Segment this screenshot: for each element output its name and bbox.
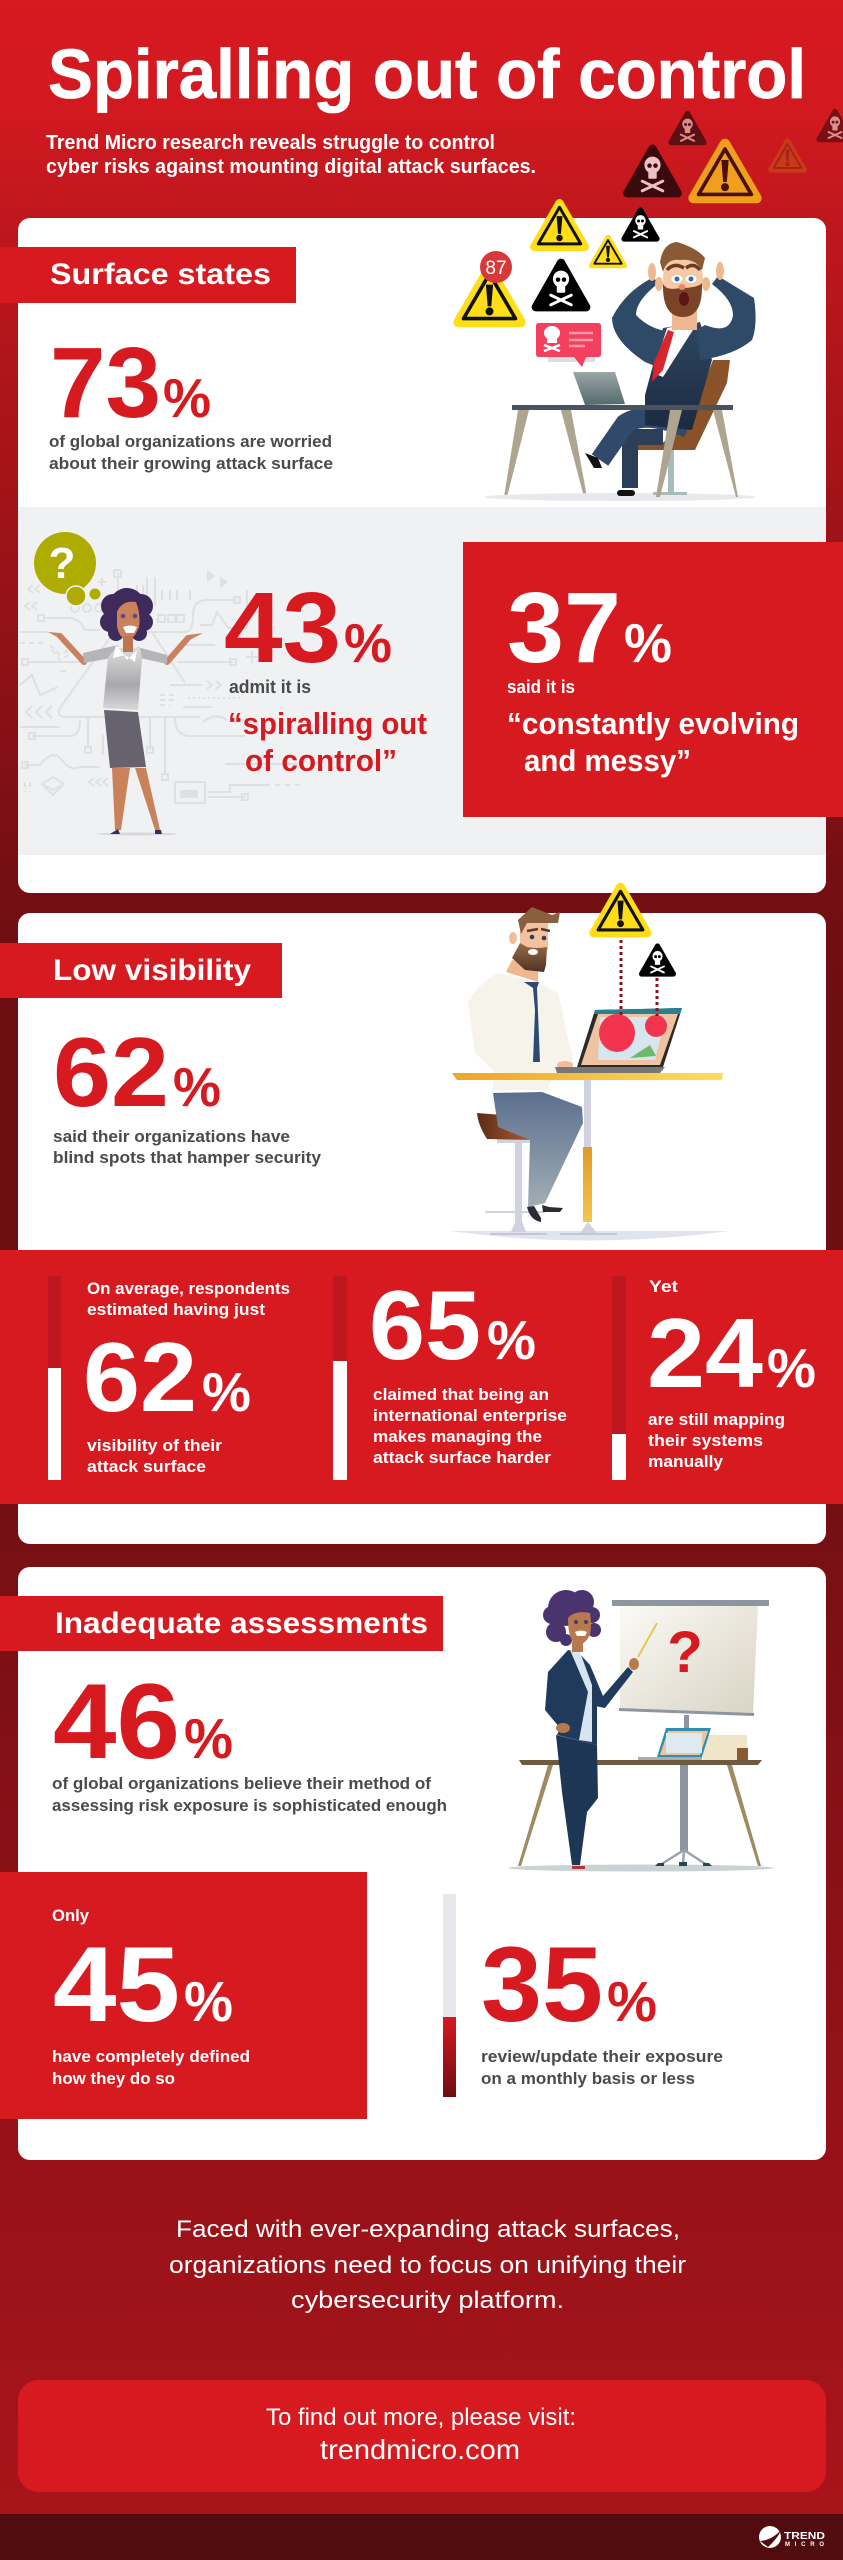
text: on average: estimated having just <box>87 1300 265 1319</box>
text: 62% description: blind spots that hamper security <box>53 1148 322 1167</box>
stat: 73%: 73 <box>50 327 161 439</box>
illustration: woman presenting at board <box>508 1590 774 1872</box>
call to action panel <box>18 2380 826 2492</box>
chair <box>622 360 730 450</box>
circuit background <box>20 570 300 803</box>
logo: trend micro: TREND <box>784 2530 825 2542</box>
text: 35% description: review/update their exposure <box>481 2047 723 2066</box>
illustration: warning icons and stressed man at desk <box>458 111 843 501</box>
card background <box>18 218 826 893</box>
text: website: trendmicro.com <box>320 2434 520 2465</box>
hair <box>100 588 153 641</box>
stat: 46% <box>53 1661 233 1781</box>
stat: 37% <box>507 572 672 684</box>
head <box>509 932 517 944</box>
text: visibility of attack surface <box>87 1436 222 1476</box>
closing statement <box>169 2216 686 2314</box>
stat: 37%: % <box>624 612 672 674</box>
text: said it is: said it is <box>507 677 575 697</box>
laptop <box>555 1008 682 1073</box>
desk back legs <box>504 410 587 497</box>
stat: 45% <box>53 1924 233 2044</box>
subtitle <box>46 132 536 178</box>
man torso <box>645 322 712 430</box>
text: 62% description: said their organizations have <box>53 1127 290 1146</box>
text: only: Only <box>52 1906 90 1925</box>
floor shadow <box>450 1231 728 1240</box>
text: find out more: To find out more, please visit: <box>266 2404 576 2431</box>
text: mapping manually <box>648 1410 785 1471</box>
text: on average <box>87 1279 290 1319</box>
text: completely defined: how they do so <box>52 2069 175 2088</box>
stat: 62% visibility: % <box>202 1361 251 1423</box>
subtitle: Trend Micro research reveals struggle to control <box>46 132 495 154</box>
panel: visibility stats band <box>0 1250 843 1504</box>
face <box>117 602 140 640</box>
bar: 35% <box>443 1894 456 2097</box>
stat: 62% visibility <box>83 1322 251 1432</box>
icon: skull triangle <box>642 946 673 974</box>
stat: 73% <box>50 327 211 439</box>
closing statement: organizations need to focus on unifying their <box>169 2252 686 2279</box>
jacket and arm <box>545 1650 597 1745</box>
stat: 24%: 24 <box>647 1298 763 1408</box>
text: yet: Yet <box>649 1277 678 1296</box>
text: claimed international enterprise: international enterprise <box>373 1406 567 1425</box>
laptop <box>573 372 625 405</box>
heading: surface states <box>0 247 296 303</box>
text: claimed international enterprise <box>373 1385 567 1467</box>
desk top <box>512 405 733 410</box>
text: completely defined: have completely defined <box>52 2047 250 2066</box>
shirt <box>570 1650 592 1742</box>
stat: 43% <box>224 572 392 684</box>
stat: 65% <box>369 1270 536 1380</box>
stat: 46%: 46 <box>53 1661 180 1781</box>
text: on average: On average, respondents <box>87 1279 290 1298</box>
skirt <box>104 710 146 768</box>
text: 35% description <box>481 2047 723 2088</box>
desk front legs <box>656 410 738 497</box>
text: mapping manually: are still mapping <box>648 1410 785 1429</box>
board: ? <box>667 1620 703 1685</box>
text: mapping manually: their systems <box>648 1431 763 1450</box>
man hands <box>648 263 656 281</box>
text: claimed international enterprise: claimed that being an <box>373 1385 549 1404</box>
text: mapping manually: manually <box>648 1452 724 1471</box>
stat: 35%: % <box>607 1970 657 2034</box>
heading: low visibility: Low visibility <box>53 954 251 987</box>
stat: 35%: 35 <box>481 1924 603 2044</box>
stat: 62%: 62 <box>53 1017 169 1127</box>
shirt <box>468 973 575 1090</box>
stat: 73%: % <box>163 367 211 429</box>
text: 46% description: assessing risk exposure is sophisticated enough <box>52 1796 447 1815</box>
bar: 24% <box>612 1276 626 1480</box>
quote: spiralling out of control <box>228 706 427 778</box>
bar: 65% <box>333 1276 347 1480</box>
stat: 24%: % <box>767 1337 816 1399</box>
laptop and papers <box>638 1728 748 1760</box>
text: claimed international enterprise: makes managing the <box>373 1427 542 1446</box>
quote: spiralling out of control: “spiralling out <box>228 706 427 741</box>
neck <box>506 960 538 982</box>
stat: 62%: % <box>173 1056 221 1118</box>
panel: 45% callout <box>0 1872 367 2119</box>
floor shadow <box>484 493 756 501</box>
title: Spiralling out of control <box>48 35 806 113</box>
text: 73% description <box>49 432 333 473</box>
man legs <box>630 437 663 488</box>
text: 73% description: of global organizations are worried <box>49 432 332 451</box>
stat: 43%: % <box>344 612 392 674</box>
bar: 62% visibility <box>48 1276 61 1480</box>
grey band <box>18 507 826 855</box>
quote: spiralling out of control: of control” <box>245 743 397 778</box>
text: 73% description: about their growing attack surface <box>49 454 333 473</box>
text: admit it is: admit it is <box>229 677 311 697</box>
text: claimed international enterprise: attack surface harder <box>373 1448 551 1467</box>
card background <box>18 1567 826 2160</box>
question bubble: ? <box>49 539 75 588</box>
man head <box>672 308 697 330</box>
face <box>568 1612 591 1645</box>
text: completely defined <box>52 2047 250 2088</box>
hand <box>557 1061 573 1069</box>
illustration: worried woman with question bubble <box>34 532 203 836</box>
shirt and tie <box>653 322 698 377</box>
icon: warning triangle <box>594 887 647 933</box>
pointer stick <box>638 1623 657 1657</box>
footer bar <box>0 2514 843 2560</box>
man arms <box>612 278 672 370</box>
icon: message bubble <box>536 323 601 367</box>
text: 62% description <box>53 1127 322 1167</box>
stool <box>515 1143 522 1223</box>
heading: low visibility <box>0 943 282 998</box>
board stand <box>684 1715 689 1729</box>
stat: 45%: % <box>184 1970 233 2034</box>
stat: 35% <box>481 1924 657 2044</box>
blouse <box>83 645 118 663</box>
stat: 46%: % <box>184 1707 233 1771</box>
board <box>612 1600 769 1716</box>
stat: 24% <box>647 1298 816 1408</box>
logo: trend micro: MICRO <box>785 2542 824 2548</box>
stat: 62% <box>53 1017 221 1127</box>
stat: 43%: 43 <box>224 572 341 684</box>
trousers <box>556 1735 598 1865</box>
question bubble <box>34 532 100 606</box>
quote: constantly evolving and messy <box>507 706 799 778</box>
tie <box>524 982 540 1062</box>
table <box>518 1760 762 1866</box>
text: 35% description: on a monthly basis or less <box>481 2069 695 2088</box>
icon: notification badge 87 <box>480 251 512 283</box>
subtitle: cyber risks against mounting digital attack surfaces. <box>46 156 536 178</box>
stat: 62% visibility: 62 <box>83 1322 197 1432</box>
closing statement: Faced with ever-expanding attack surfaces, <box>176 2216 680 2243</box>
panel: surface states <box>0 218 843 893</box>
floor shadow <box>508 1864 774 1872</box>
quote: constantly evolving and messy: “constantly evolving <box>507 706 799 741</box>
legs <box>112 768 160 830</box>
table <box>452 1073 723 1080</box>
quote: constantly evolving and messy: and messy” <box>524 743 691 778</box>
blind spots <box>599 940 667 1052</box>
illustration: man at laptop with blind spots <box>450 887 728 1240</box>
stat: 37%: 37 <box>507 572 621 684</box>
stat: 65%: 65 <box>369 1270 481 1380</box>
icon: warning swarm <box>458 111 843 322</box>
heading: inadequate assessments <box>0 1596 443 1651</box>
text: visibility of attack surface: visibility of their <box>87 1436 222 1455</box>
heading: inadequate assessments: Inadequate assessments <box>55 1607 428 1640</box>
text: visibility of attack surface: attack surface <box>87 1457 206 1476</box>
card background <box>18 913 826 1544</box>
pants <box>493 1092 583 1207</box>
text: 46% description: of global organizations believe their method of <box>52 1774 431 1793</box>
panel: inadequate assessments <box>0 1567 826 2160</box>
logo: trend micro <box>759 2526 825 2548</box>
hair <box>543 1590 601 1646</box>
panel: 37% callout <box>463 542 843 817</box>
shoes <box>527 1206 541 1222</box>
panel: low visibility <box>0 887 826 1544</box>
table pole <box>584 1080 591 1147</box>
arms <box>60 636 188 662</box>
heading: surface states: Surface states <box>50 258 271 291</box>
stat: 65%: % <box>487 1309 536 1371</box>
icon: notification badge 87: 87 <box>485 258 507 279</box>
closing statement: cybersecurity platform. <box>291 2287 564 2314</box>
stat: 45%: 45 <box>53 1924 180 2044</box>
text: 46% description <box>52 1774 447 1815</box>
